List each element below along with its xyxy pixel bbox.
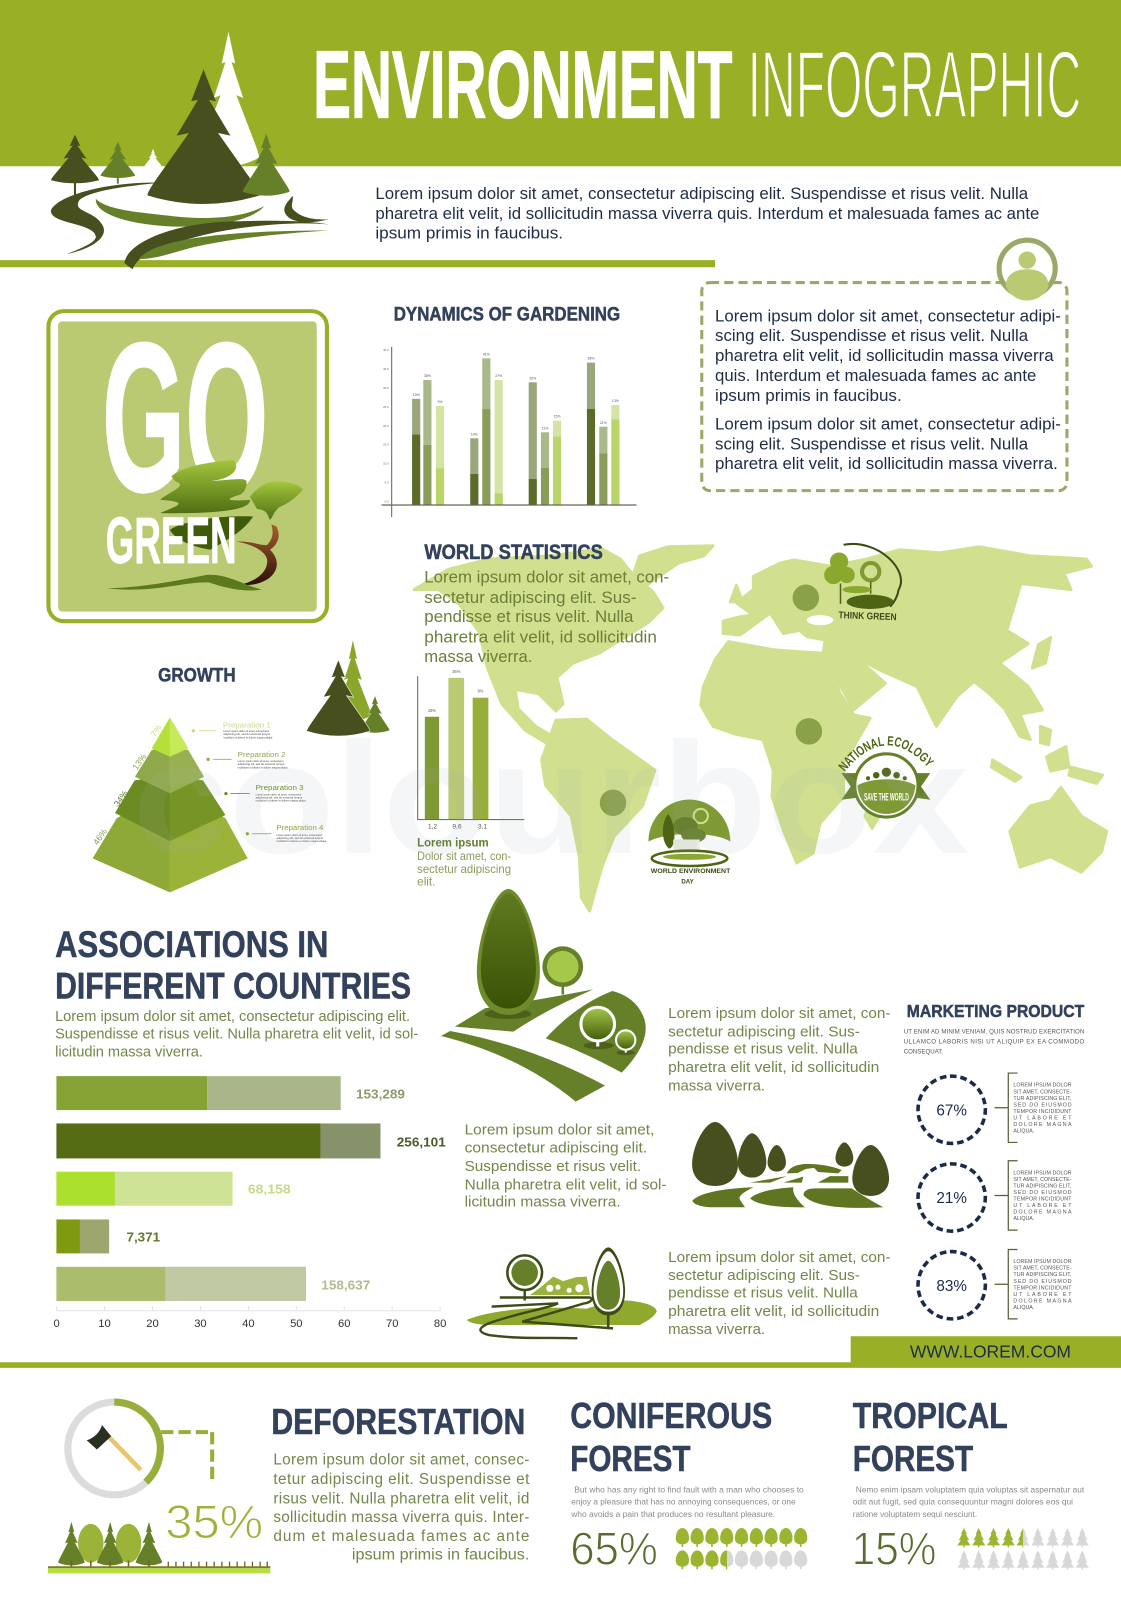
text: park description 1: pharetra elit velit, id sollicitudin xyxy=(668,1060,879,1076)
panel: tropical forest: Nemo enim ipsam voluptatem quia voluptas sit aspernatur aut xyxy=(856,1485,1085,1494)
illustration: park with tall tree xyxy=(441,889,646,1102)
bar chart: lorem ipsum: elit. xyxy=(417,875,435,888)
deforestation text: ipsum primis in faucibus. xyxy=(352,1547,529,1564)
illustration: tree row with paths xyxy=(692,1122,889,1208)
stat 67%: LOREM IPSUM DOLOR xyxy=(1013,1083,1072,1089)
note text: scing elit. Suspendisse et risus velit. Nulla xyxy=(715,435,1029,453)
panel: marketing product: UT ENIM AD MINIM VENIAM, QUIS NOSTRUD EXERCITATION xyxy=(904,1028,1084,1035)
bar chart: dynamics: 41% xyxy=(483,352,490,356)
note text: pharetra elit velit, id sollicitudin massa viverra. xyxy=(715,455,1058,473)
bar chart: dynamics: 25% xyxy=(529,376,536,380)
preparation labels: adipiscing elit, sed do eiusmod tempor xyxy=(223,732,270,736)
map: islands xyxy=(730,586,1103,828)
text: park description 1: Lorem ipsum dolor sit amet, con- xyxy=(668,1006,891,1022)
bar chart: dynamics: 30.0 xyxy=(383,386,389,390)
stat 83%: ALIQUA. xyxy=(1013,1305,1034,1311)
icon row: 65% trees xyxy=(676,1528,807,1569)
text: park description 2: Lorem ipsum dolor sit amet, xyxy=(465,1122,654,1138)
bar chart: lorem ipsum: sectetur adipiscing xyxy=(417,863,511,876)
bar chart: lorem ipsum: Dolor sit amet, con- xyxy=(417,850,511,863)
bar chart: lorem ipsum: 36% xyxy=(452,669,461,674)
world statistics text: sectetur adipiscing elit. Sus- xyxy=(424,589,636,607)
deforestation text: risus velit. Nulla pharetra elit velit, id xyxy=(273,1491,529,1508)
world statistics text: massa viverra. xyxy=(424,648,532,666)
world statistics text: pendisse et risus velit. Nulla xyxy=(424,608,634,626)
world statistics text xyxy=(424,568,669,666)
pyramid chart xyxy=(91,717,327,892)
preparation labels: Lorem ipsum dolor sit amet, consectetur xyxy=(256,793,302,797)
text: park description 3: pendisse et risus velit. Nulla xyxy=(668,1285,859,1301)
note text: pharetra elit velit, id sollicitudin massa viverra xyxy=(715,347,1055,365)
stat 21% xyxy=(916,1161,1072,1233)
preparation labels xyxy=(192,720,327,843)
tier 7% xyxy=(152,717,188,757)
badge: world environment day: WORLD ENVIRONMENT xyxy=(651,868,731,875)
stat 21%: SIT AMET, CONSECTE- xyxy=(1013,1177,1072,1183)
panel: marketing product: MARKETING PRODUCT xyxy=(907,1001,1084,1021)
stat 83%: DOLORE MAGNA xyxy=(1013,1298,1072,1304)
associations text: Suspendisse et risus velit. Nulla pharetra elit velit, id sol- xyxy=(55,1026,418,1042)
stat 21%: UT LABORE ET xyxy=(1013,1203,1072,1209)
bar chart: dynamics: 35.0 xyxy=(383,367,389,371)
tier 34% xyxy=(115,775,225,841)
heading: growth: GROWTH xyxy=(158,664,236,686)
stat 67%: TEMPOR INCIDIDUNT xyxy=(1013,1109,1072,1115)
horizontal bar chart: 0 xyxy=(53,1318,60,1330)
stat 83%: SED DO EIUSMOD xyxy=(1013,1279,1072,1285)
horizontal bar chart: 153,289 xyxy=(356,1087,405,1102)
stat 83%: LOREM IPSUM DOLOR xyxy=(1013,1259,1072,1265)
world statistics text: Lorem ipsum dolor sit amet, con- xyxy=(424,568,669,586)
note text: Lorem ipsum dolor sit amet, consectetur adipi- xyxy=(715,415,1061,433)
bar chart: lorem ipsum: 1,2 xyxy=(428,823,437,830)
badge: national ecology: SAVE THE WORLD xyxy=(864,792,909,804)
preparation labels: incididunt ut labore et dolore magna aliqua xyxy=(256,799,306,803)
bar chart: lorem ipsum: 9% xyxy=(477,689,484,694)
bar chart: dynamics: 13% xyxy=(612,399,619,403)
stat 83% xyxy=(916,1250,1072,1321)
footer url bar: WWW.LOREM.COM xyxy=(910,1342,1071,1362)
footer url bar xyxy=(0,1336,1121,1368)
badge: think green: THINK GREEN xyxy=(838,610,897,623)
horizontal bar chart: 158,637 xyxy=(321,1277,370,1292)
stat 83%: TEMPOR INCIDIDUNT xyxy=(1013,1285,1072,1291)
stat 21%: TEMPOR INCIDIDUNT xyxy=(1013,1197,1072,1203)
preparation labels: Preparation 1 xyxy=(223,720,271,729)
text: park description 1 xyxy=(668,1006,891,1094)
bar chart: lorem ipsum: Lorem ipsum xyxy=(417,837,489,850)
text: park description 2: licitudin massa viverra. xyxy=(465,1195,621,1211)
deforestation text xyxy=(273,1452,530,1564)
panel: coniferous forest: FOREST xyxy=(570,1439,691,1479)
map black sea xyxy=(807,615,833,625)
text: park description 3: sectetur adipiscing elit. Sus- xyxy=(668,1268,860,1284)
icon: axe gauge xyxy=(68,1402,212,1495)
bar chart: dynamics: 11% xyxy=(542,426,548,430)
intro text xyxy=(375,185,1039,243)
horizontal bar chart: 20 xyxy=(146,1318,159,1330)
stat 21%: LOREM IPSUM DOLOR xyxy=(1013,1170,1072,1176)
panel: marketing product xyxy=(904,1001,1085,1321)
pyramid chart: 13% xyxy=(130,752,149,772)
stat 83%: UT LABORE ET xyxy=(1013,1292,1072,1298)
stat 67%: SED DO EIUSMOD xyxy=(1013,1102,1072,1108)
badge: national ecology xyxy=(838,736,934,819)
panel: marketing product: CONSEQUAT. xyxy=(904,1049,943,1056)
preparation labels: Preparation 4 xyxy=(276,823,324,832)
horizontal bar chart xyxy=(53,1076,446,1330)
panel: tropical forest xyxy=(852,1396,1089,1575)
heading: associations xyxy=(55,924,411,1007)
header band xyxy=(0,0,1121,166)
panel: coniferous forest: But who has any right to find fault with a man who chooses to xyxy=(574,1485,804,1494)
icon: forest logo xyxy=(51,32,328,269)
text: park description 3 xyxy=(668,1250,891,1338)
text: park description 2: Suspendisse et risus velit. xyxy=(465,1159,641,1175)
preparation labels: Lorem ipsum dolor sit amet, consectetur xyxy=(223,729,269,733)
bar chart: dynamics: 13% xyxy=(413,393,420,397)
pyramid chart: 46% xyxy=(91,827,109,847)
stat 67%: ALIQUA. xyxy=(1013,1128,1034,1134)
preparation labels: adipiscing elit, sed do eiusmod tempor xyxy=(238,762,285,766)
tier 13% xyxy=(135,747,204,793)
note text: quis. Interdum et malesuada fames ac ante xyxy=(715,367,1036,385)
world statistics text: pharetra elit velit, id sollicitudin xyxy=(424,629,657,647)
text: park description 2: Nulla pharetra elit velit, id sol- xyxy=(465,1177,667,1193)
icon: conifer group xyxy=(307,640,390,736)
note text: Lorem ipsum dolor sit amet, consectetur adipi- xyxy=(715,307,1061,325)
intro text: Lorem ipsum dolor sit amet, consectetur adipiscing elit. Suspendisse et risus velit. Nulla xyxy=(375,185,1029,203)
pyramid chart: 7% xyxy=(148,723,164,739)
preparation labels: adipiscing elit, sed do eiusmod tempor xyxy=(256,796,303,800)
text: park description 3: massa viverra. xyxy=(668,1322,765,1338)
horizontal bar chart: 30 xyxy=(194,1318,207,1330)
icon: person badge xyxy=(999,240,1055,301)
map: North America xyxy=(414,549,663,747)
associations text: licitudin massa viverra. xyxy=(55,1045,203,1061)
bar chart: dynamics: 25.0 xyxy=(383,405,389,409)
map: Australia xyxy=(1010,787,1107,872)
stat 83%: SIT AMET, CONSECTE- xyxy=(1013,1266,1072,1272)
heading: associations: ASSOCIATIONS IN xyxy=(55,924,328,965)
stat 67%: UT LABORE ET xyxy=(1013,1115,1072,1121)
text: park description 1: massa viverra. xyxy=(668,1078,765,1094)
stat 67%: DOLORE MAGNA xyxy=(1013,1122,1072,1128)
badge: think green xyxy=(824,544,901,623)
badge: national ecology: NATIONAL ECOLOGY xyxy=(838,736,934,772)
panel: tropical forest: FOREST xyxy=(853,1439,973,1479)
deforestation text: Lorem ipsum dolor sit amet, consec- xyxy=(273,1452,529,1469)
map: Africa xyxy=(701,642,870,863)
icon: wind-blown tree xyxy=(107,460,303,591)
preparation labels: adipiscing elit, sed do eiusmod tempor xyxy=(276,836,323,840)
bar chart: lorem ipsum: 19% xyxy=(428,708,436,713)
panel: tropical forest: 15% xyxy=(852,1523,936,1575)
intro text: ipsum primis in faucibus. xyxy=(375,225,563,243)
pyramid chart: 34% xyxy=(112,788,130,808)
stat 83%: TUR ADIPISCING ELIT, xyxy=(1013,1272,1072,1278)
bar chart: lorem ipsum: 9,6 xyxy=(452,823,462,830)
panel: go green: GREEN xyxy=(106,504,237,578)
badge: world environment day xyxy=(648,800,731,885)
panel: tropical forest: odit aut fugit, sed quia consequuntur magni dolores eos qui xyxy=(853,1498,1073,1507)
text: park description 1: sectetur adipiscing elit. Sus- xyxy=(668,1024,860,1040)
preparation labels: Preparation 3 xyxy=(256,783,304,792)
panel: coniferous forest xyxy=(570,1396,807,1575)
tier 46% xyxy=(93,785,248,892)
preparation labels: incididunt ut labore et dolore magna aliqua xyxy=(223,736,273,740)
bar chart: dynamics: 21% xyxy=(600,421,607,425)
bar chart: dynamics: 38% xyxy=(424,374,431,378)
deforestation text: dum et malesuada fames ac ante xyxy=(273,1528,529,1545)
bar chart: dynamics: 15.0 xyxy=(383,443,389,447)
panel: coniferous forest: CONIFEROUS xyxy=(570,1396,772,1436)
preparation labels: incididunt ut labore et dolore magna aliqua xyxy=(276,839,327,843)
stat 21%: 21% xyxy=(936,1190,967,1207)
bar chart: lorem ipsum: 3,1 xyxy=(478,823,487,830)
panel: tropical forest: ratione voluptatem sequi nesciunt. xyxy=(853,1510,977,1519)
bar chart: dynamics: 38% xyxy=(588,357,594,361)
title: ENVIRONMENT xyxy=(313,31,732,138)
panel: go green: GO xyxy=(102,299,268,536)
preparation labels: Lorem ipsum dolor sit amet, consectetur xyxy=(276,833,322,837)
horizontal bar chart: 7,371 xyxy=(126,1229,160,1244)
heading: dynamics of gardening: DYNAMICS OF GARDENING xyxy=(394,303,620,325)
panel: coniferous forest: enjoy a pleasure that has no annoying consequences, or one xyxy=(571,1498,796,1507)
panel: marketing product: ULLAMCO LABORIS NISI UT ALIQUIP EX EA COMMODO xyxy=(904,1038,1085,1045)
watermark: colourbox xyxy=(133,710,969,887)
horizontal bar chart: 10 xyxy=(98,1318,111,1330)
panel: tropical forest: TROPICAL xyxy=(853,1396,1008,1436)
stat 21%: DOLORE MAGNA xyxy=(1013,1210,1072,1216)
bar chart: dynamics: 40.0 xyxy=(383,348,389,352)
stat 21%: ALIQUA. xyxy=(1013,1216,1034,1222)
bar chart: dynamics: 9% xyxy=(438,400,443,404)
heading: world statistics: WORLD STATISTICS xyxy=(424,540,603,564)
bar chart: dynamics: 27% xyxy=(495,374,502,378)
horizontal bar chart: 256,101 xyxy=(397,1135,446,1150)
note text: scing elit. Suspendisse et risus velit. Nulla xyxy=(715,327,1029,345)
deforestation text: sollicitudin massa viverra quis. Inter- xyxy=(273,1509,529,1526)
heading: associations: DIFFERENT COUNTRIES xyxy=(55,966,411,1007)
heading: deforestation: DEFORESTATION xyxy=(271,1402,525,1442)
panel: dashed note box xyxy=(702,240,1067,491)
map: South America xyxy=(542,719,655,911)
stat 35%: 35% xyxy=(165,1496,263,1548)
preparation labels: Preparation 2 xyxy=(238,750,286,759)
stat 67%: SIT AMET, CONSECTE- xyxy=(1013,1089,1072,1095)
divider under header xyxy=(0,260,715,267)
bar chart: dynamics: 10.0 xyxy=(383,462,389,466)
deforestation text: tetur adipiscing elit. Suspendisse et xyxy=(273,1471,530,1488)
bar chart: dynamics: 14% xyxy=(471,433,478,437)
preparation labels: incididunt ut labore et dolore magna aliqua xyxy=(238,766,288,770)
bar chart: dynamics: 5.0 xyxy=(385,481,389,485)
note text: ipsum primis in faucibus. xyxy=(715,387,902,405)
text: park description 2 xyxy=(465,1122,667,1211)
bar chart: dynamics: 20.0 xyxy=(383,424,389,428)
stat 67% xyxy=(916,1073,1072,1145)
associations text xyxy=(55,1009,418,1061)
associations text: Lorem ipsum dolor sit amet, consectetur adipiscing elit. xyxy=(55,1009,410,1025)
intro text: pharetra elit velit, id sollicitudin massa viverra quis. Interdum et malesuada fames ac ante xyxy=(375,205,1039,223)
stat 67%: 67% xyxy=(936,1102,967,1119)
map: Eurasia xyxy=(723,547,1091,740)
map markers xyxy=(600,584,822,816)
horizontal bar chart: 60 xyxy=(338,1318,350,1330)
text: park description 1: pendisse et risus velit. Nulla xyxy=(668,1042,859,1058)
horizontal bar chart: 50 xyxy=(290,1318,303,1330)
world map xyxy=(414,546,1107,911)
stat 21%: TUR ADIPISCING ELIT, xyxy=(1013,1184,1072,1190)
panel: coniferous forest: 65% xyxy=(570,1523,658,1575)
illustration: winding road park xyxy=(467,1249,657,1338)
panel: go green xyxy=(48,299,327,621)
horizontal bar chart: 40 xyxy=(242,1318,255,1330)
icon: forest with stumps xyxy=(48,1522,270,1573)
bar chart: dynamics: 15% xyxy=(554,415,560,419)
stat 21%: SED DO EIUSMOD xyxy=(1013,1190,1072,1196)
preparation labels: Lorem ipsum dolor sit amet, consectetur xyxy=(238,759,284,763)
stat 83%: 83% xyxy=(936,1278,967,1295)
map: Greenland xyxy=(634,546,713,587)
text: park description 3: pharetra elit velit, id sollicitudin xyxy=(668,1304,879,1320)
note text xyxy=(715,307,1061,473)
text: park description 3: Lorem ipsum dolor sit amet, con- xyxy=(668,1250,891,1266)
icon row: 15% trees xyxy=(957,1528,1089,1570)
stat 67%: TUR ADIPISCING ELIT, xyxy=(1013,1096,1072,1102)
horizontal bar chart: 68,158 xyxy=(248,1181,291,1196)
horizontal bar chart: 70 xyxy=(386,1318,398,1330)
text: park description 2: consectetur adipiscing elit. xyxy=(465,1141,647,1157)
horizontal bar chart: 80 xyxy=(434,1318,446,1330)
badge: world environment day: DAY xyxy=(681,878,694,885)
bar chart: lorem ipsum xyxy=(417,669,524,888)
panel: coniferous forest: who avoids a pain that produces no resultant pleasure. xyxy=(570,1510,775,1519)
bar chart: dynamics: 0.0 xyxy=(385,500,389,504)
bar chart: dynamics xyxy=(381,347,636,517)
